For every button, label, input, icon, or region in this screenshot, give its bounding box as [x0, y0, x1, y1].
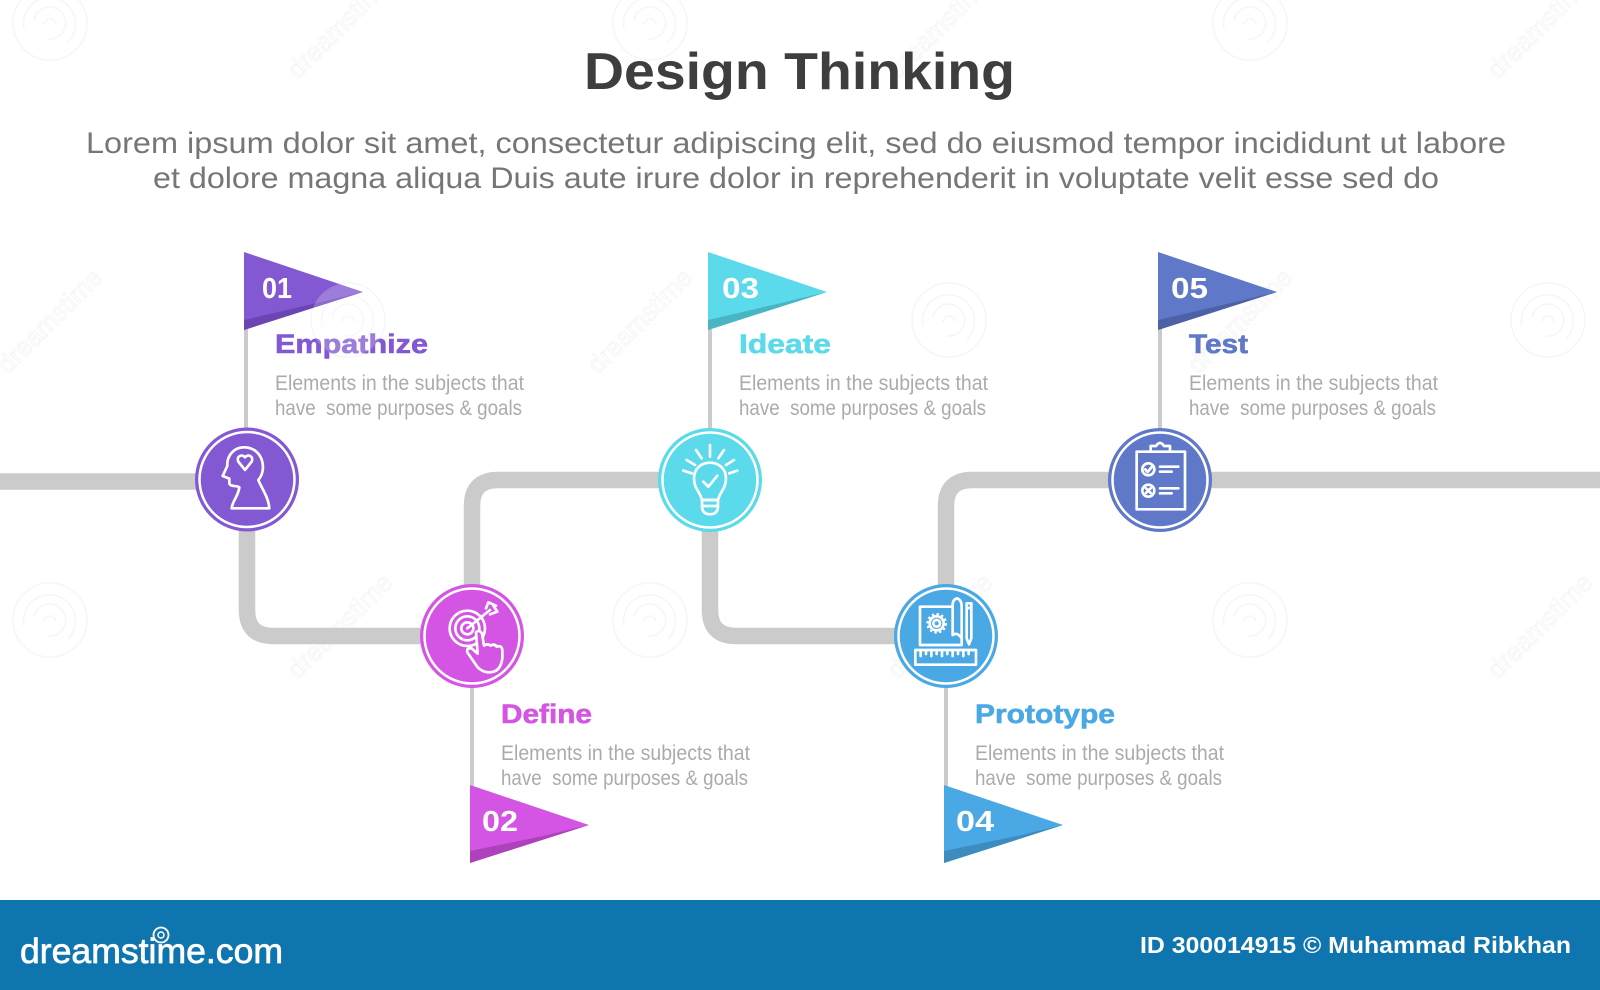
description 03: Elements in the subjects that — [739, 372, 988, 395]
watermark spirals: dreamstime — [581, 262, 698, 379]
circle icon: head with heart — [195, 428, 299, 532]
footer bar — [0, 900, 1600, 990]
watermark spirals — [0, 0, 1598, 684]
step 04: Prototype — [894, 584, 1224, 863]
step 02: Define — [420, 584, 750, 863]
flag 04: 04 — [956, 806, 994, 838]
flag 04 — [944, 785, 1063, 863]
title: Design Thinking — [584, 43, 1015, 101]
flag 03 — [708, 252, 827, 330]
footer logo: dreamstime.com — [20, 932, 283, 971]
flag 02 — [470, 785, 589, 863]
footer credit: ID 300014915 © Muhammad Ribkhan — [1140, 932, 1571, 958]
heading: Test: Test — [1189, 329, 1248, 359]
description 04 — [975, 742, 1224, 790]
description 01 — [275, 372, 524, 420]
circle icon: blueprint, pencil and ruler — [894, 584, 998, 688]
description 04: have some purposes & goals — [975, 767, 1222, 790]
flag 03: 03 — [722, 273, 759, 305]
description 05: Elements in the subjects that — [1189, 372, 1438, 395]
flag 02: 02 — [482, 806, 518, 838]
description 05: have some purposes & goals — [1189, 397, 1436, 420]
description 03: have some purposes & goals — [739, 397, 986, 420]
description 01: have some purposes & goals — [275, 397, 522, 420]
heading: Prototype: Prototype — [975, 699, 1115, 729]
heading: Empathize: Empathize — [275, 329, 428, 359]
heading: Ideate: Ideate — [739, 329, 831, 359]
description 02: Elements in the subjects that — [501, 742, 750, 765]
circle icon: target and hand — [420, 584, 524, 688]
watermark spirals: dreamstime — [281, 567, 398, 684]
step 05: Test — [1108, 252, 1438, 532]
subtitle text block — [86, 127, 1506, 195]
flag 01: 01 — [262, 273, 292, 305]
flag 05 — [1158, 252, 1277, 330]
flag 01 — [244, 252, 363, 330]
heading: Define: Define — [501, 699, 592, 729]
description 05 — [1189, 372, 1438, 420]
subtitle text block: Lorem ipsum dolor sit amet, consectetur adipiscing elit, sed do eiusmod tempor incididunt ut labore — [86, 127, 1506, 160]
subtitle text block: et dolore magna aliqua Duis aute irure dolor in reprehenderit in voluptate velit esse sed do — [153, 162, 1439, 195]
winding road track — [0, 480, 1600, 636]
circle icon: clipboard checklist — [1108, 428, 1212, 532]
watermark spirals: dreamstime — [1181, 262, 1298, 379]
watermark spirals: dreamstime — [881, 567, 998, 684]
description 04: Elements in the subjects that — [975, 742, 1224, 765]
circle icon: light bulb — [658, 428, 762, 532]
watermark wash over flag tip and heading — [311, 283, 385, 357]
description 01: Elements in the subjects that — [275, 372, 524, 395]
description 02 — [501, 742, 750, 790]
step 01: Empathize — [195, 252, 524, 532]
watermark spirals: dreamstime — [1481, 567, 1598, 684]
description 02: have some purposes & goals — [501, 767, 748, 790]
flag 05: 05 — [1171, 273, 1208, 305]
description 03 — [739, 372, 988, 420]
step 03: Ideate — [658, 252, 988, 532]
